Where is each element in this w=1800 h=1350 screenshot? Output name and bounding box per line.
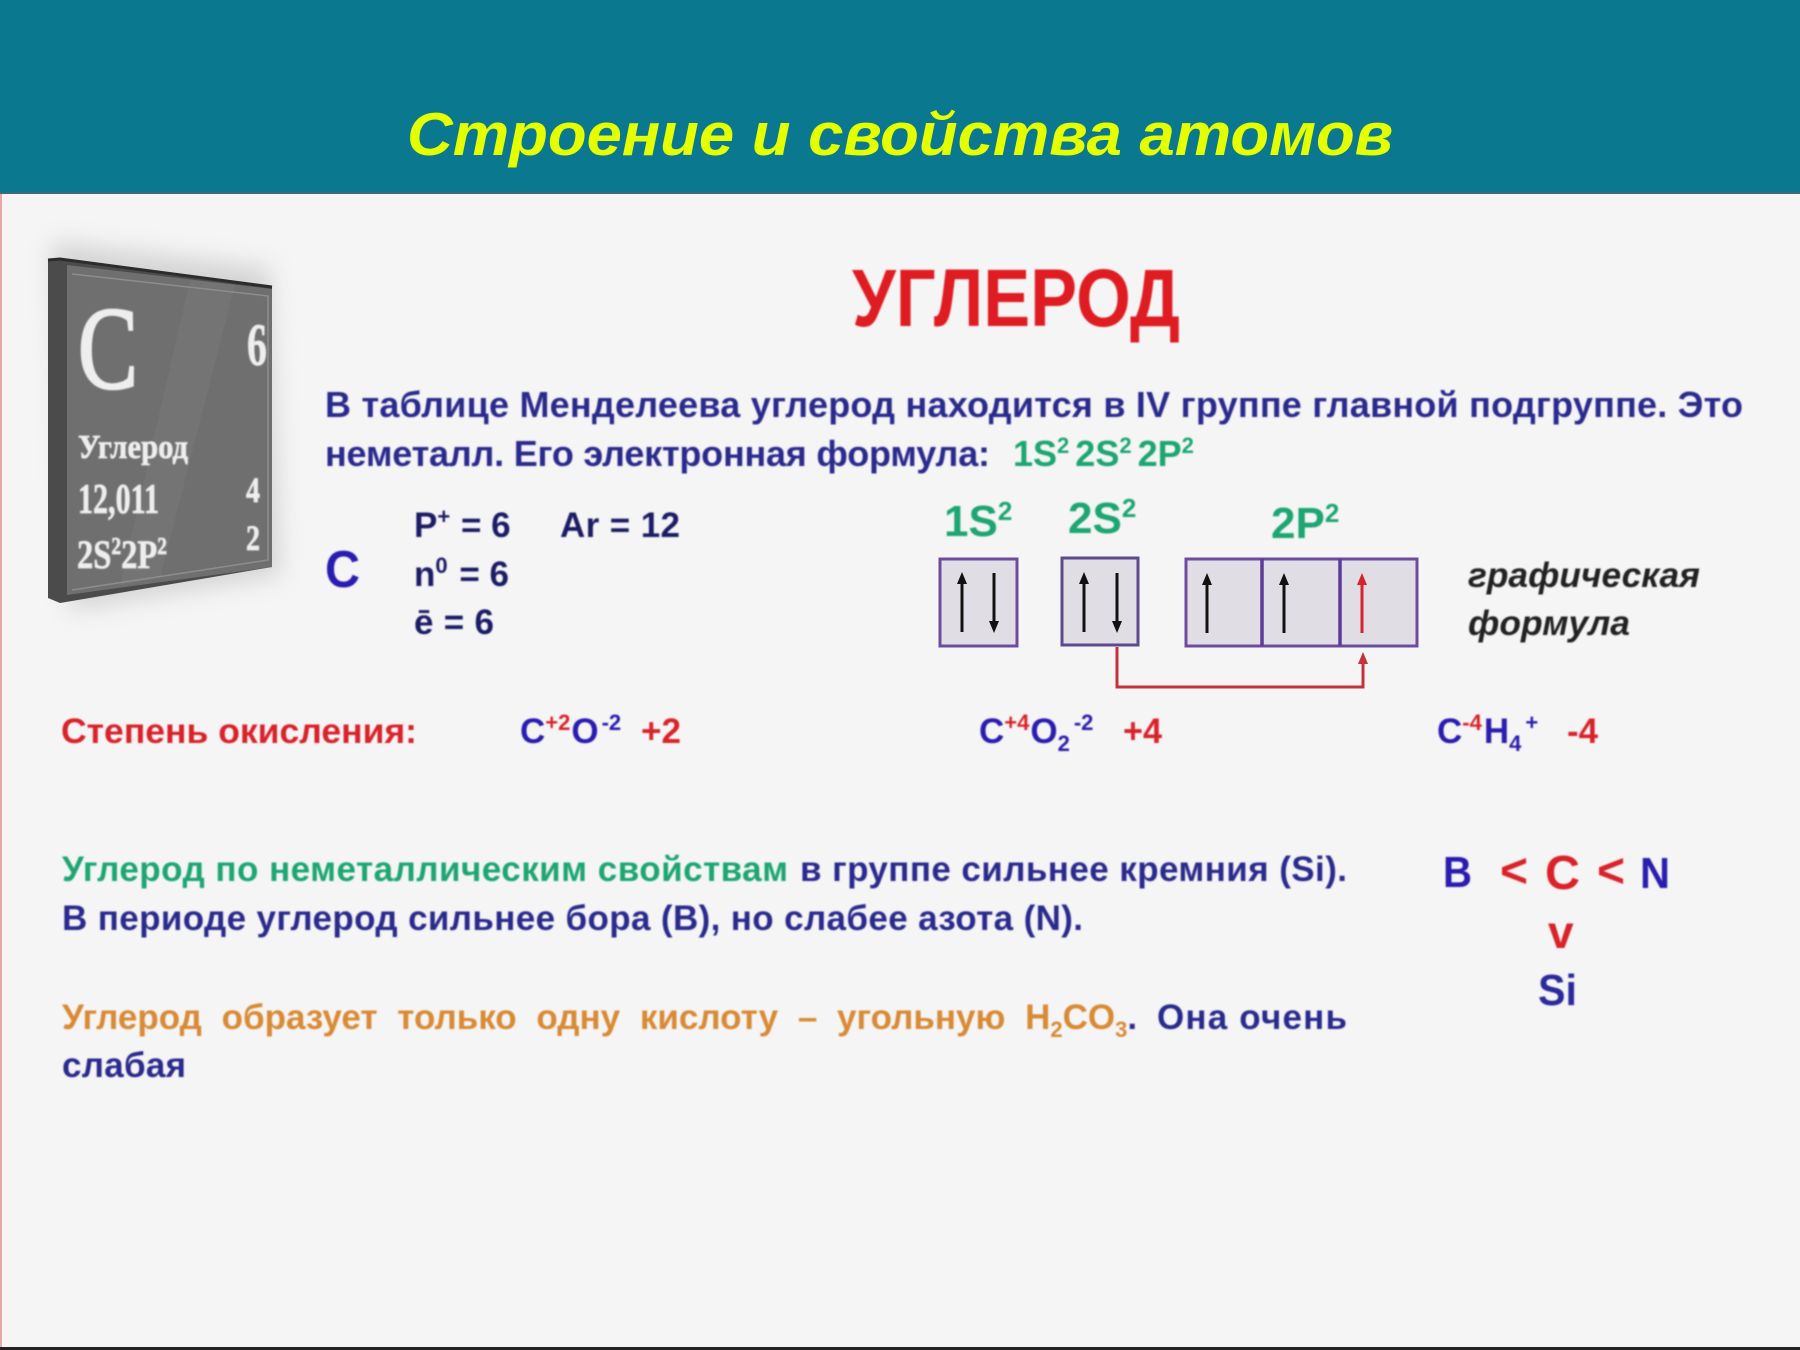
CO2 formula: +4: [1004, 710, 1030, 735]
intro text line 2: неметалл. Его электронная формула:: [325, 433, 990, 474]
label: graphic formula line 2: формула: [1468, 604, 1630, 643]
value +4: +4: [1123, 712, 1163, 751]
value +2: +2: [641, 712, 681, 751]
electron formula: 2S: [1075, 433, 1119, 474]
oxidation state label: Степень окисления:: [61, 712, 417, 751]
CO2 formula: O: [1030, 712, 1058, 751]
header band: [0, 0, 1800, 194]
value -4: -4: [1567, 712, 1599, 751]
CH4 formula: 4: [1509, 731, 1522, 756]
acid text, orange part: 2: [1050, 1017, 1063, 1042]
label 2S2: 2: [1122, 493, 1136, 523]
acid text, orange part: 3: [1115, 1017, 1127, 1042]
CH4 formula: C: [1437, 712, 1462, 751]
symbol C: C: [325, 541, 360, 599]
CO2 formula: 2: [1058, 731, 1070, 756]
comparison: less than: <: [1500, 845, 1528, 898]
CO formula: O: [571, 712, 599, 751]
configuration: 2S: [77, 532, 119, 577]
CO formula: C: [520, 712, 545, 751]
electron formula: 2: [1057, 433, 1069, 458]
label 2P2: 2: [1325, 498, 1339, 528]
element card: carbon: [48, 242, 280, 610]
atomic number: 6: [247, 312, 267, 378]
CH4 formula: H: [1484, 712, 1509, 751]
acid text, orange part: CO: [1063, 998, 1115, 1037]
element name: Углерод: [78, 429, 188, 466]
CO2 formula: -2: [1074, 710, 1093, 735]
atomic mass: 12,011: [78, 477, 159, 523]
label: graphic formula line 1: графическая: [1468, 556, 1700, 595]
period comparison: В периоде углерод сильнее бора (В), но слабее азота (N).: [62, 899, 1083, 938]
protons: P: [414, 506, 437, 545]
shell count 4: 4: [246, 470, 260, 510]
electron formula: 2P: [1138, 433, 1182, 474]
acid text, orange part: .: [1127, 998, 1137, 1037]
configuration: 2P: [121, 532, 157, 577]
label 2S2: 2S: [1068, 494, 1122, 543]
arrow: electron transition: [1117, 647, 1368, 687]
acid text, navy part: Она очень: [1157, 998, 1347, 1037]
label 2P2: 2P: [1271, 499, 1325, 548]
shell count 2: 2: [246, 518, 260, 558]
neutrons: = 6: [450, 555, 509, 594]
protons: +: [437, 504, 450, 529]
intro text line 1: В таблице Менделеева углерод находится в IV группе главной подгруппе. Это: [325, 384, 1743, 425]
orbital box 1S: [940, 559, 1017, 646]
configuration: 2: [157, 534, 167, 560]
electrons: ē = 6: [414, 603, 494, 642]
comparison: B: B: [1443, 848, 1472, 897]
comparison: Si: Si: [1538, 966, 1577, 1015]
orbital box 2S: [1062, 558, 1138, 645]
CO formula: +2: [545, 710, 570, 735]
neutrons: 0: [435, 553, 448, 578]
comparison: less than: <: [1597, 845, 1625, 898]
comparison: v: v: [1548, 906, 1574, 958]
orbital diagram: [940, 558, 1417, 687]
configuration: 2: [111, 534, 121, 560]
label 1S2: 2: [998, 496, 1012, 526]
CO2 formula: C: [979, 712, 1004, 751]
electron formula: 2: [1119, 433, 1132, 458]
orbital boxes 2P: [1186, 559, 1417, 646]
neutrons: n: [414, 555, 435, 594]
comparison: N: N: [1640, 849, 1670, 898]
atomic mass value: Ar = 12: [560, 506, 680, 545]
electron formula: 1S: [1013, 433, 1057, 474]
heading: carbon: УГЛЕРОД: [852, 253, 1180, 344]
protons: = 6: [451, 506, 511, 545]
CH4 formula: +: [1525, 710, 1538, 735]
element symbol: C: [78, 283, 138, 414]
electron formula: 2: [1182, 433, 1194, 458]
label 1S2: 1S: [944, 497, 998, 546]
comparison: C: C: [1545, 847, 1580, 900]
CH4 formula: -4: [1462, 710, 1483, 735]
CO formula: -2: [602, 710, 621, 735]
acid text, orange part: Углерод образует только одну кислоту – угольную H: [62, 998, 1050, 1037]
nonmetal comparison, navy part: в группе сильнее кремния (Si).: [800, 850, 1347, 889]
nonmetal comparison, green part: Углерод по неметаллическим свойствам: [62, 850, 788, 889]
title: Строение и свойства атомов: [407, 101, 1393, 168]
acid text, last line: слабая: [62, 1046, 186, 1085]
